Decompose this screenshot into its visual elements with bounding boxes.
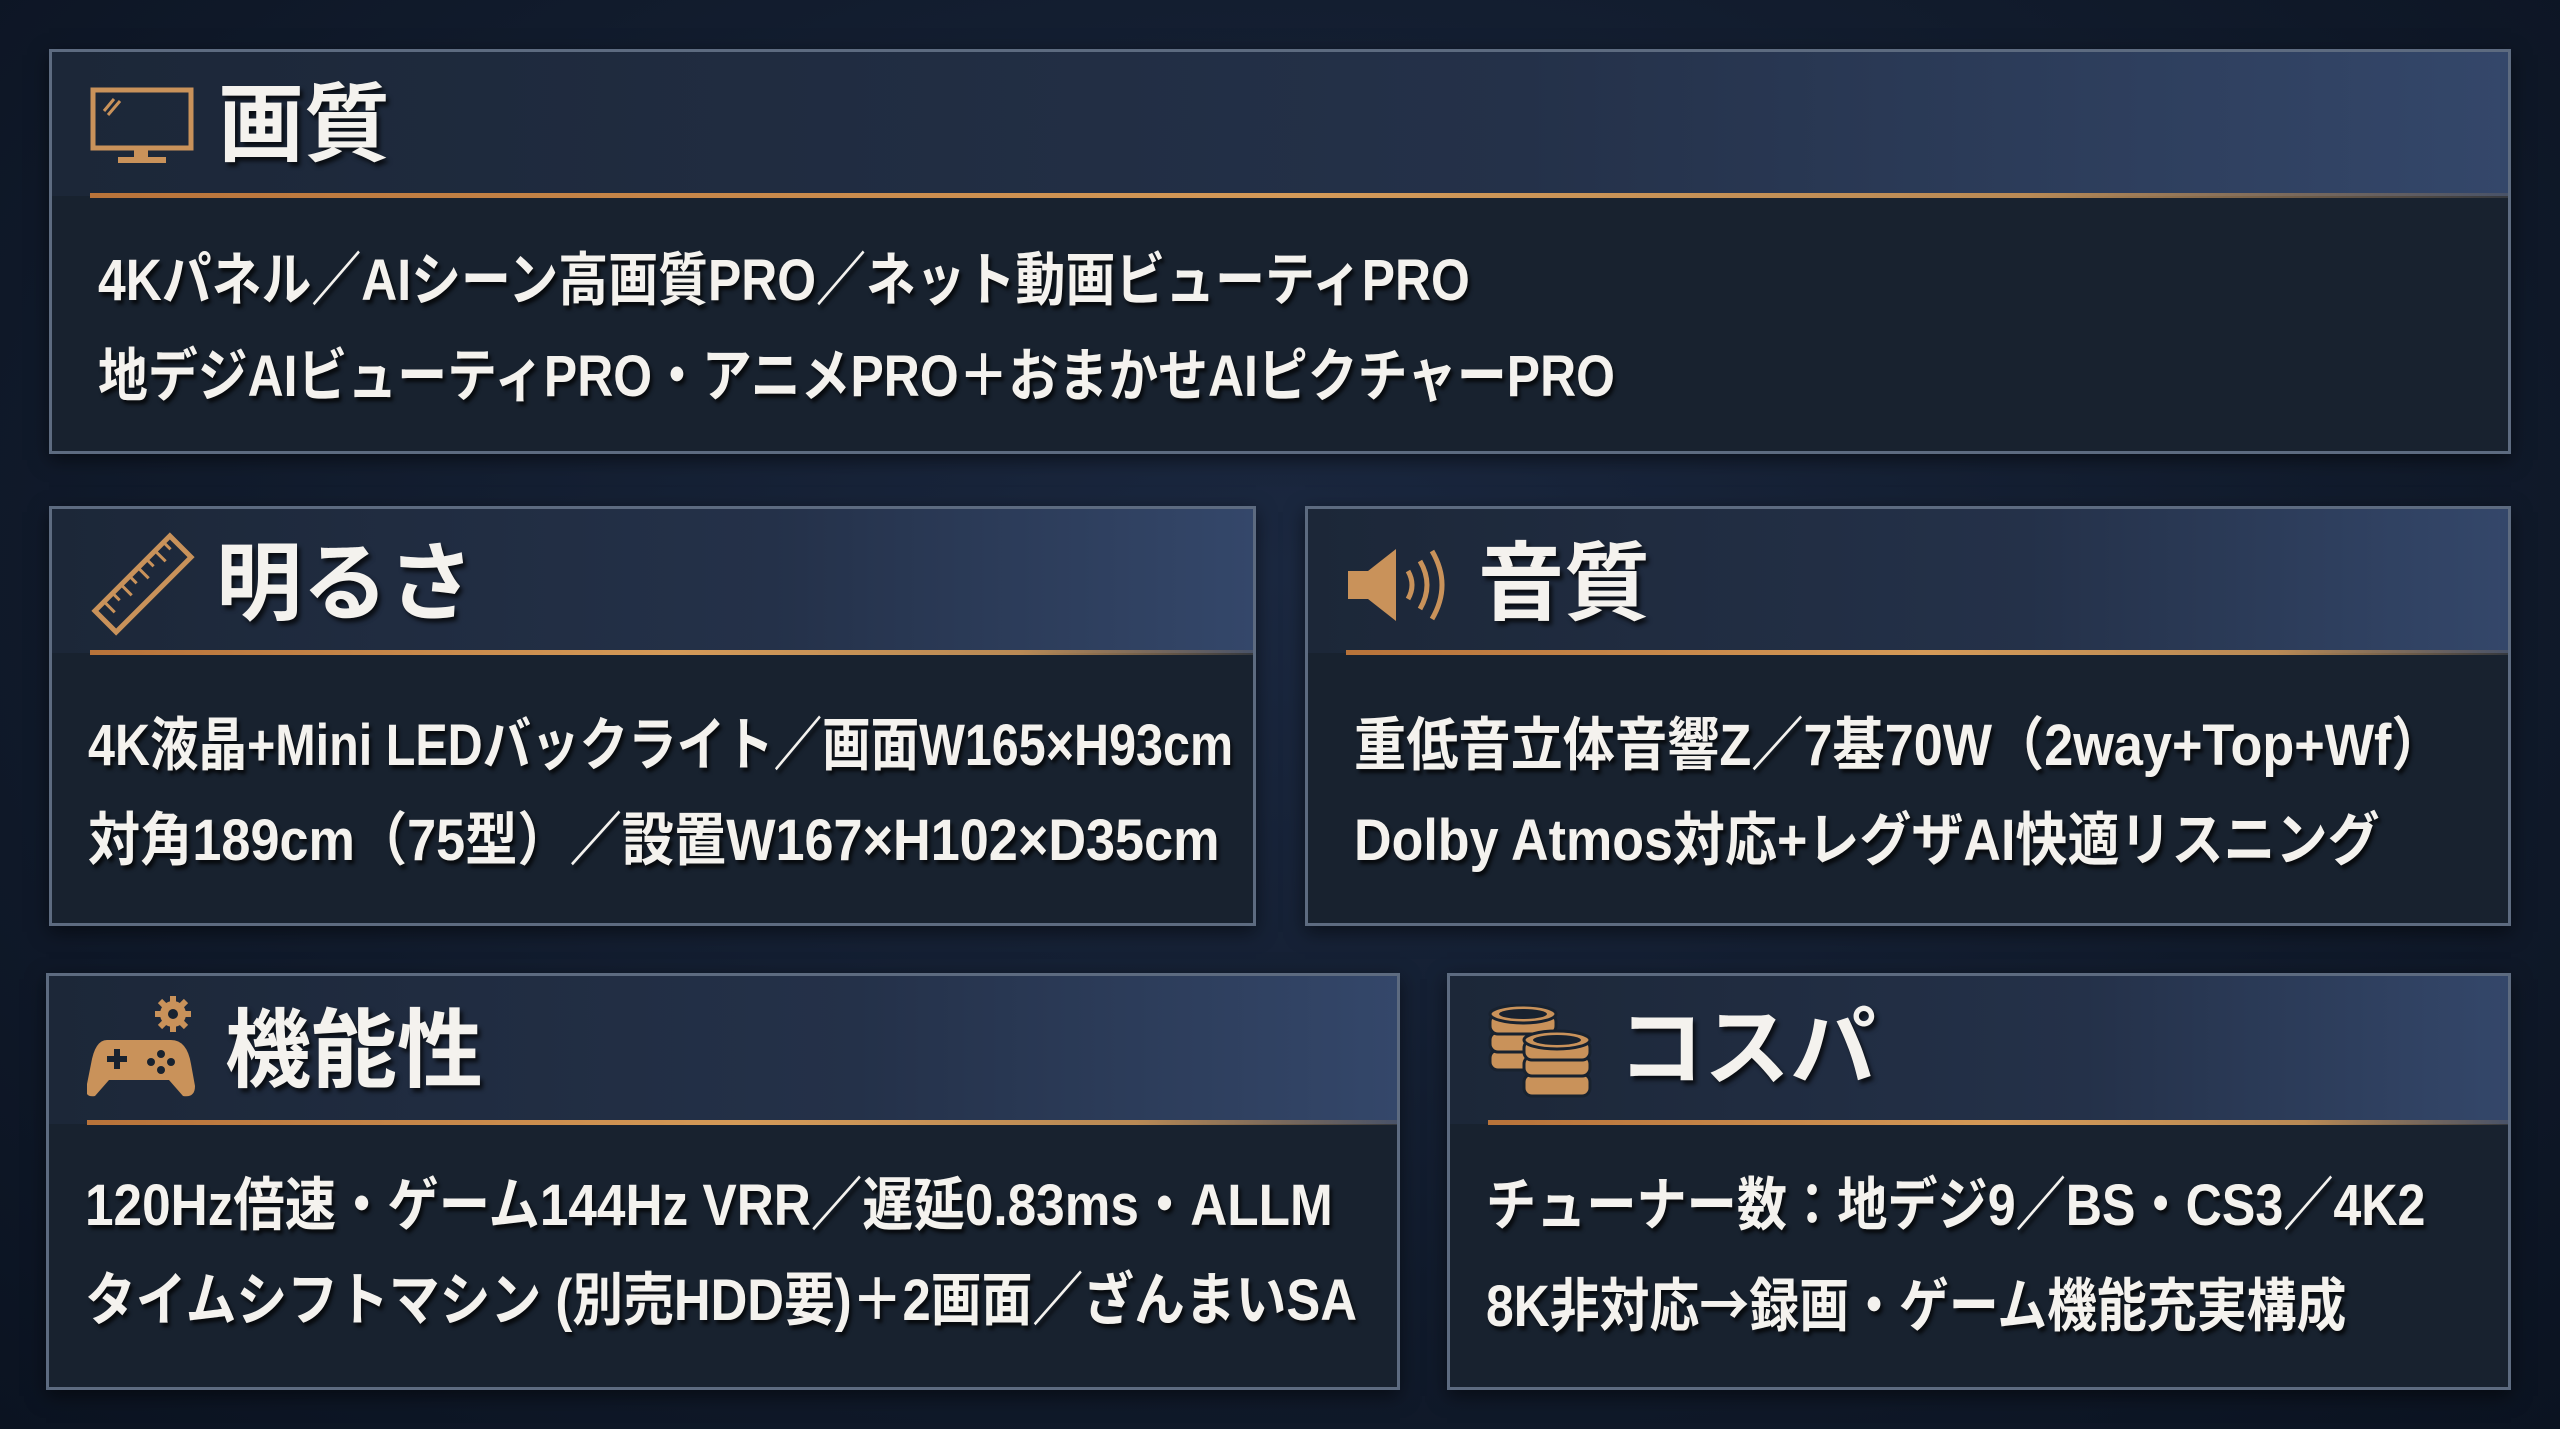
icon: speaker	[1348, 549, 1444, 621]
panel: 画質	[49, 49, 2511, 454]
panel: 音質	[1305, 506, 2511, 926]
icon: gamepad with gear	[87, 996, 195, 1096]
heading: 明るさ	[216, 536, 474, 632]
panel: コスパ	[1447, 973, 2511, 1390]
text block: チューナー数：地デジ9／BS・CS3／4K2	[1486, 1173, 2425, 1238]
panel: 明るさ	[49, 506, 1256, 926]
text block: 重低音立体音響Z／7基70W（2way+Top+Wf）	[1354, 713, 2444, 778]
heading: 機能性	[225, 1003, 483, 1099]
text block: 4K液晶+Mini LEDバックライト／画面W165×H93cm	[88, 713, 1233, 778]
text block: 8K非対応→録画・ゲーム機能充実構成	[1486, 1259, 2346, 1343]
panel: 機能性	[46, 973, 1400, 1390]
heading: 音質	[1478, 536, 1650, 632]
heading: 画質	[218, 77, 390, 173]
text block: Dolby Atmos対応+レグザAI快適リスニング	[1354, 808, 2380, 873]
text block: 地デジAIビューティPRO・アニメPRO＋おまかせAIピクチャーPRO	[98, 344, 1615, 409]
text block: 4Kパネル／AIシーン高画質PRO／ネット動画ビューティPRO	[98, 248, 1470, 313]
text block: 対角189cm（75型）／設置W167×H102×D35cm	[88, 808, 1220, 873]
icon: coins	[1488, 1004, 1592, 1098]
heading: コスパ	[1618, 1001, 1876, 1097]
icon: tv	[90, 88, 194, 163]
text block: 120Hz倍速・ゲーム144Hz VRR／遅延0.83ms・ALLM	[85, 1173, 1333, 1238]
text block: タイムシフトマシン (別売HDD要)＋2画面／ざんまいSA	[85, 1268, 1357, 1333]
icon: ruler	[91, 532, 194, 636]
